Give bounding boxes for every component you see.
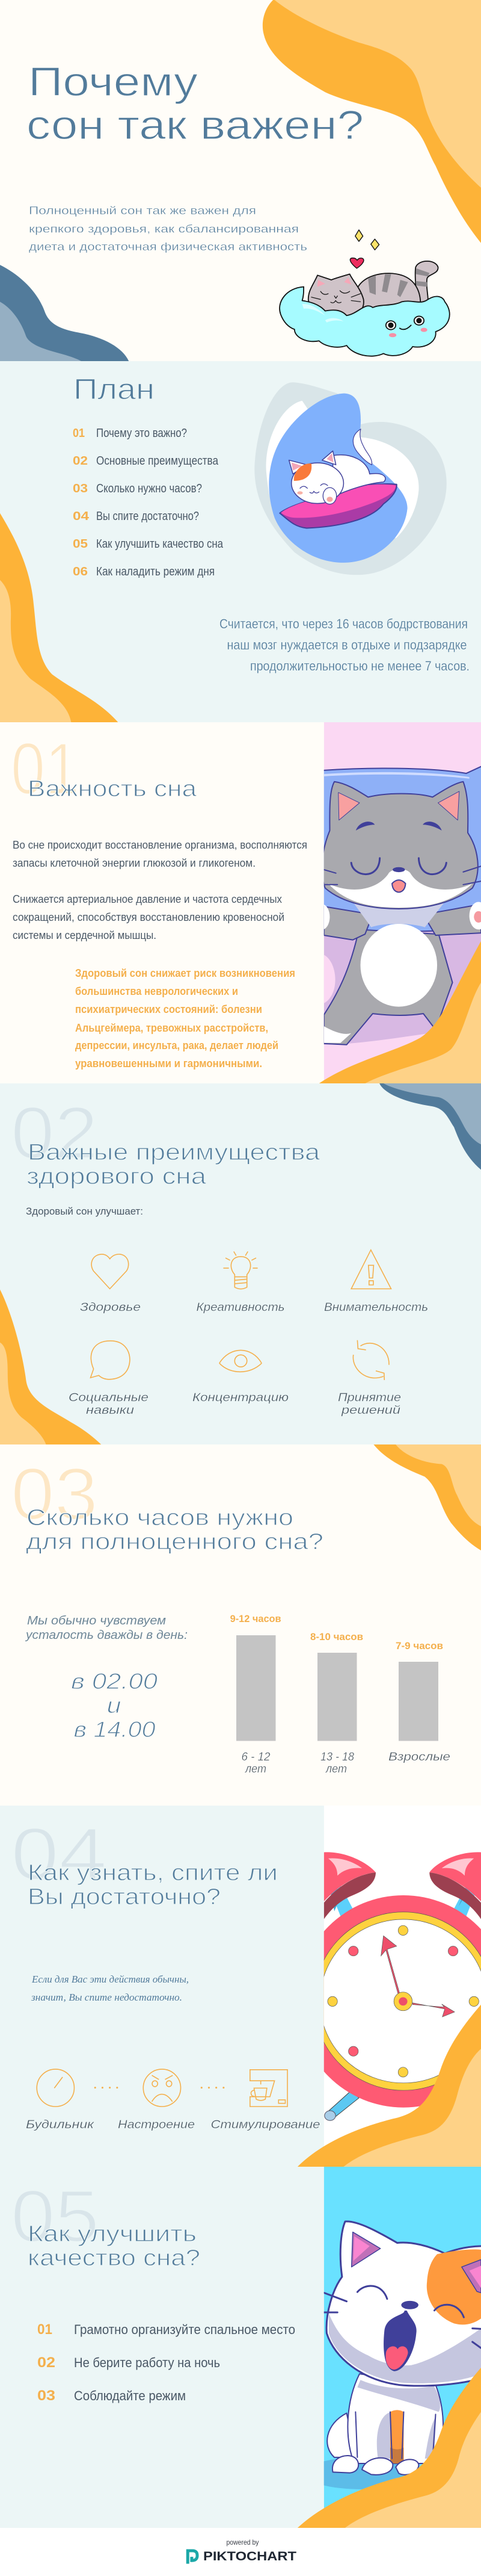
footer: Piktochart credit [0, 2528, 481, 2576]
text block: sleep body effects: сокращений, способствуя восстановлению кровеносной [13, 911, 284, 923]
callout: disease risk: уравновешенными и гармоничными. [75, 1057, 262, 1070]
callout: tired times: в 02.00 [71, 1669, 158, 1694]
list: plan items: 02 [73, 454, 88, 468]
heading: enough sleep [28, 1860, 278, 1910]
labels: benefits: Креативность [196, 1301, 285, 1314]
callout: disease risk: большинства неврологических и [75, 985, 238, 997]
illustration: yawning cat [323, 2167, 481, 2509]
text block: sleep body effects: Снижается артериальное давление и частота сердечных [13, 893, 282, 905]
list: plan items: 03 [73, 482, 88, 495]
decorative blobs: cover [0, 0, 481, 361]
list: plan items: Основные преимущества [96, 454, 219, 468]
illustration: alarm clock [323, 1806, 481, 2146]
list: sleep tips: Грамотно организуйте спальное место [74, 2322, 295, 2337]
footer text: powered by [226, 2538, 259, 2547]
bar chart: sleep hours by age: 7-9 часов [396, 1640, 443, 1652]
heading: improve sleep: качество сна? [28, 2246, 200, 2271]
text: signs note [31, 1974, 189, 2003]
list: sleep tips: Не берите работу на ночь [74, 2355, 220, 2370]
labels: sleep signs: Настроение [118, 2119, 195, 2131]
text: tiredness: Мы обычно чувствуем [27, 1614, 166, 1627]
logo icon [188, 2551, 197, 2564]
callout: 16 hours fact [219, 616, 470, 673]
icons: six benefits [91, 1250, 391, 1380]
decorative blobs: 05 [298, 2368, 481, 2528]
bar chart: sleep hours by age: 6 - 12 [242, 1751, 271, 1763]
list: plan items: Как улучшить качество сна [96, 537, 224, 551]
labels: sleep signs: Стимулирование [210, 2119, 320, 2131]
heading: improve sleep [28, 2221, 200, 2271]
callout: disease risk: психиатрических состояний: болезни [75, 1003, 262, 1015]
callout: disease risk: депрессии, инсульта, рака, делает людей [75, 1039, 278, 1051]
dotted connector [95, 2087, 124, 2088]
callout: disease risk: Альцгеймера, тревожных расстройств, [75, 1022, 268, 1034]
heading: enough sleep: Как узнать, спите ли [28, 1860, 278, 1886]
section number 01: 01 [11, 728, 79, 810]
icon: eye [219, 1350, 262, 1372]
bar chart: sleep hours by age: 13 - 18 [320, 1751, 354, 1763]
panel: 05 improve sleep [0, 2167, 481, 2528]
heading: importance of sleep: Важность сна [28, 776, 197, 802]
text block: sleep body effects: Во сне происходит восстановление организма, восполняются [13, 839, 307, 851]
callout: disease risk [75, 967, 295, 1070]
panel: 01 importance of sleep [0, 722, 481, 1083]
title [26, 59, 364, 148]
list: plan items: Вы спите достаточно? [96, 510, 199, 523]
list: plan items [73, 427, 224, 578]
list: sleep tips [37, 2321, 295, 2404]
labels: benefits: Здоровье [80, 1301, 141, 1314]
icons: sleep signs [37, 2069, 287, 2107]
icon: warning triangle [351, 1250, 391, 1289]
labels: benefits: Концентрацию [192, 1392, 289, 1404]
section number 02: 02 [11, 1092, 98, 1174]
icon: speech bubble [91, 1341, 130, 1379]
icon: angry face [143, 2069, 181, 2107]
text block: sleep body effects [13, 839, 307, 941]
text: signs note: значит, Вы спите недостаточно. [31, 1992, 182, 2003]
bar chart: sleep hours by age: Взрослые [388, 1751, 450, 1763]
text block: sleep body effects: системы и сердечной мышцы. [13, 929, 156, 941]
list: plan items: Почему это важно? [96, 427, 187, 440]
heading: improve sleep: Как улучшить [28, 2221, 197, 2247]
section number 04: 04 [11, 1813, 107, 1895]
list: plan items: 04 [73, 510, 90, 523]
text: tiredness [25, 1614, 188, 1642]
text: signs note: Если для Вас эти действия обычны, [31, 1974, 189, 1985]
labels: sleep signs: Будильник [26, 2119, 94, 2131]
bar chart: sleep hours by age: лет [325, 1763, 347, 1776]
callout: disease risk: Здоровый сон снижает риск возникновения [75, 967, 295, 979]
icon: coffee machine [250, 2070, 287, 2107]
list: plan items: Сколько нужно часов? [96, 482, 202, 495]
heading: hours: для полноценного сна? [26, 1529, 323, 1555]
callout: tired times [71, 1669, 158, 1742]
list: plan items: 01 [73, 427, 85, 440]
bar chart: sleep hours by age: 9-12 часов [230, 1613, 281, 1624]
list: sleep tips: 02 [37, 2355, 55, 2371]
labels: sleep signs [26, 2119, 320, 2131]
panel: 04 enough sleep [0, 1806, 481, 2167]
bar chart: sleep hours by age: лет [245, 1763, 266, 1776]
illustration: cat sleeping on a cloud [280, 230, 450, 356]
list: plan items: 05 [73, 537, 88, 551]
labels: benefits: решений [341, 1404, 401, 1417]
section number 05: 05 [11, 2175, 99, 2257]
text block: sleep body effects: запасы клеточной энергии глюкозой и гликогеном. [13, 857, 256, 869]
decorative blobs: plan [0, 513, 118, 722]
heading: hours [26, 1505, 323, 1555]
decorative blobs: 03 [373, 1444, 481, 1550]
heading: benefits [26, 1140, 320, 1189]
panel: cover [0, 0, 481, 361]
title: сон так важен? [26, 102, 364, 148]
labels: benefits: Внимательность [324, 1301, 428, 1314]
panel: plan [0, 361, 481, 722]
bar chart: sleep hours by age: 8-10 часов [310, 1631, 363, 1643]
text: tiredness: усталость дважды в день: [25, 1629, 188, 1642]
list: sleep tips: 03 [37, 2388, 55, 2404]
labels: benefits: навыки [86, 1404, 135, 1417]
title: Почему [28, 59, 198, 105]
icon: heart [91, 1254, 129, 1289]
decorative blobs: 04 [298, 2005, 481, 2167]
icon: cycle arrows [353, 1340, 389, 1380]
icon: alarm dial [37, 2069, 74, 2107]
intro text: Полноценный сон так же важен для [29, 204, 256, 217]
decorative blobs: 02 [0, 1083, 481, 1444]
list: plan items: 06 [73, 565, 88, 578]
heading: benefits: Важные преимущества [28, 1140, 320, 1165]
text: intro to benefits: Здоровый сон улучшает: [26, 1206, 143, 1217]
intro text: диета и достаточная физическая активность [29, 240, 307, 253]
bar chart: sleep hours by age [230, 1613, 450, 1776]
icon: light bulb [223, 1251, 258, 1289]
panel: 02 benefits [0, 1083, 481, 1444]
section number 03: 03 [11, 1453, 98, 1535]
panel: 03 hours of sleep [0, 1444, 481, 1806]
illustration: grey cat [314, 722, 481, 1083]
list: plan items: Как наладить режим дня [96, 565, 215, 578]
labels: benefits: Социальные [69, 1392, 149, 1404]
heading: plan: План [73, 374, 155, 406]
logo wordmark: PIKTOCHART [203, 2550, 296, 2563]
dotted connector [201, 2087, 231, 2088]
illustration: kitten on a pillow [254, 382, 447, 575]
list: sleep tips: 01 [37, 2321, 52, 2338]
labels: benefits: Принятие [338, 1392, 401, 1404]
intro text [29, 204, 307, 253]
list: sleep tips: Соблюдайте режим [74, 2388, 186, 2403]
callout: tired times: в 14.00 [73, 1717, 156, 1742]
heading: enough sleep: Вы достаточно? [28, 1884, 221, 1910]
intro text: крепкого здоровья, как сбалансированная [29, 223, 299, 235]
labels: benefits [69, 1301, 428, 1417]
decorative blobs: 01 [319, 941, 481, 1083]
heading: benefits: здорового сна [26, 1164, 207, 1189]
heading: hours: Сколько часов нужно [26, 1505, 293, 1531]
callout: tired times: и [107, 1693, 121, 1718]
